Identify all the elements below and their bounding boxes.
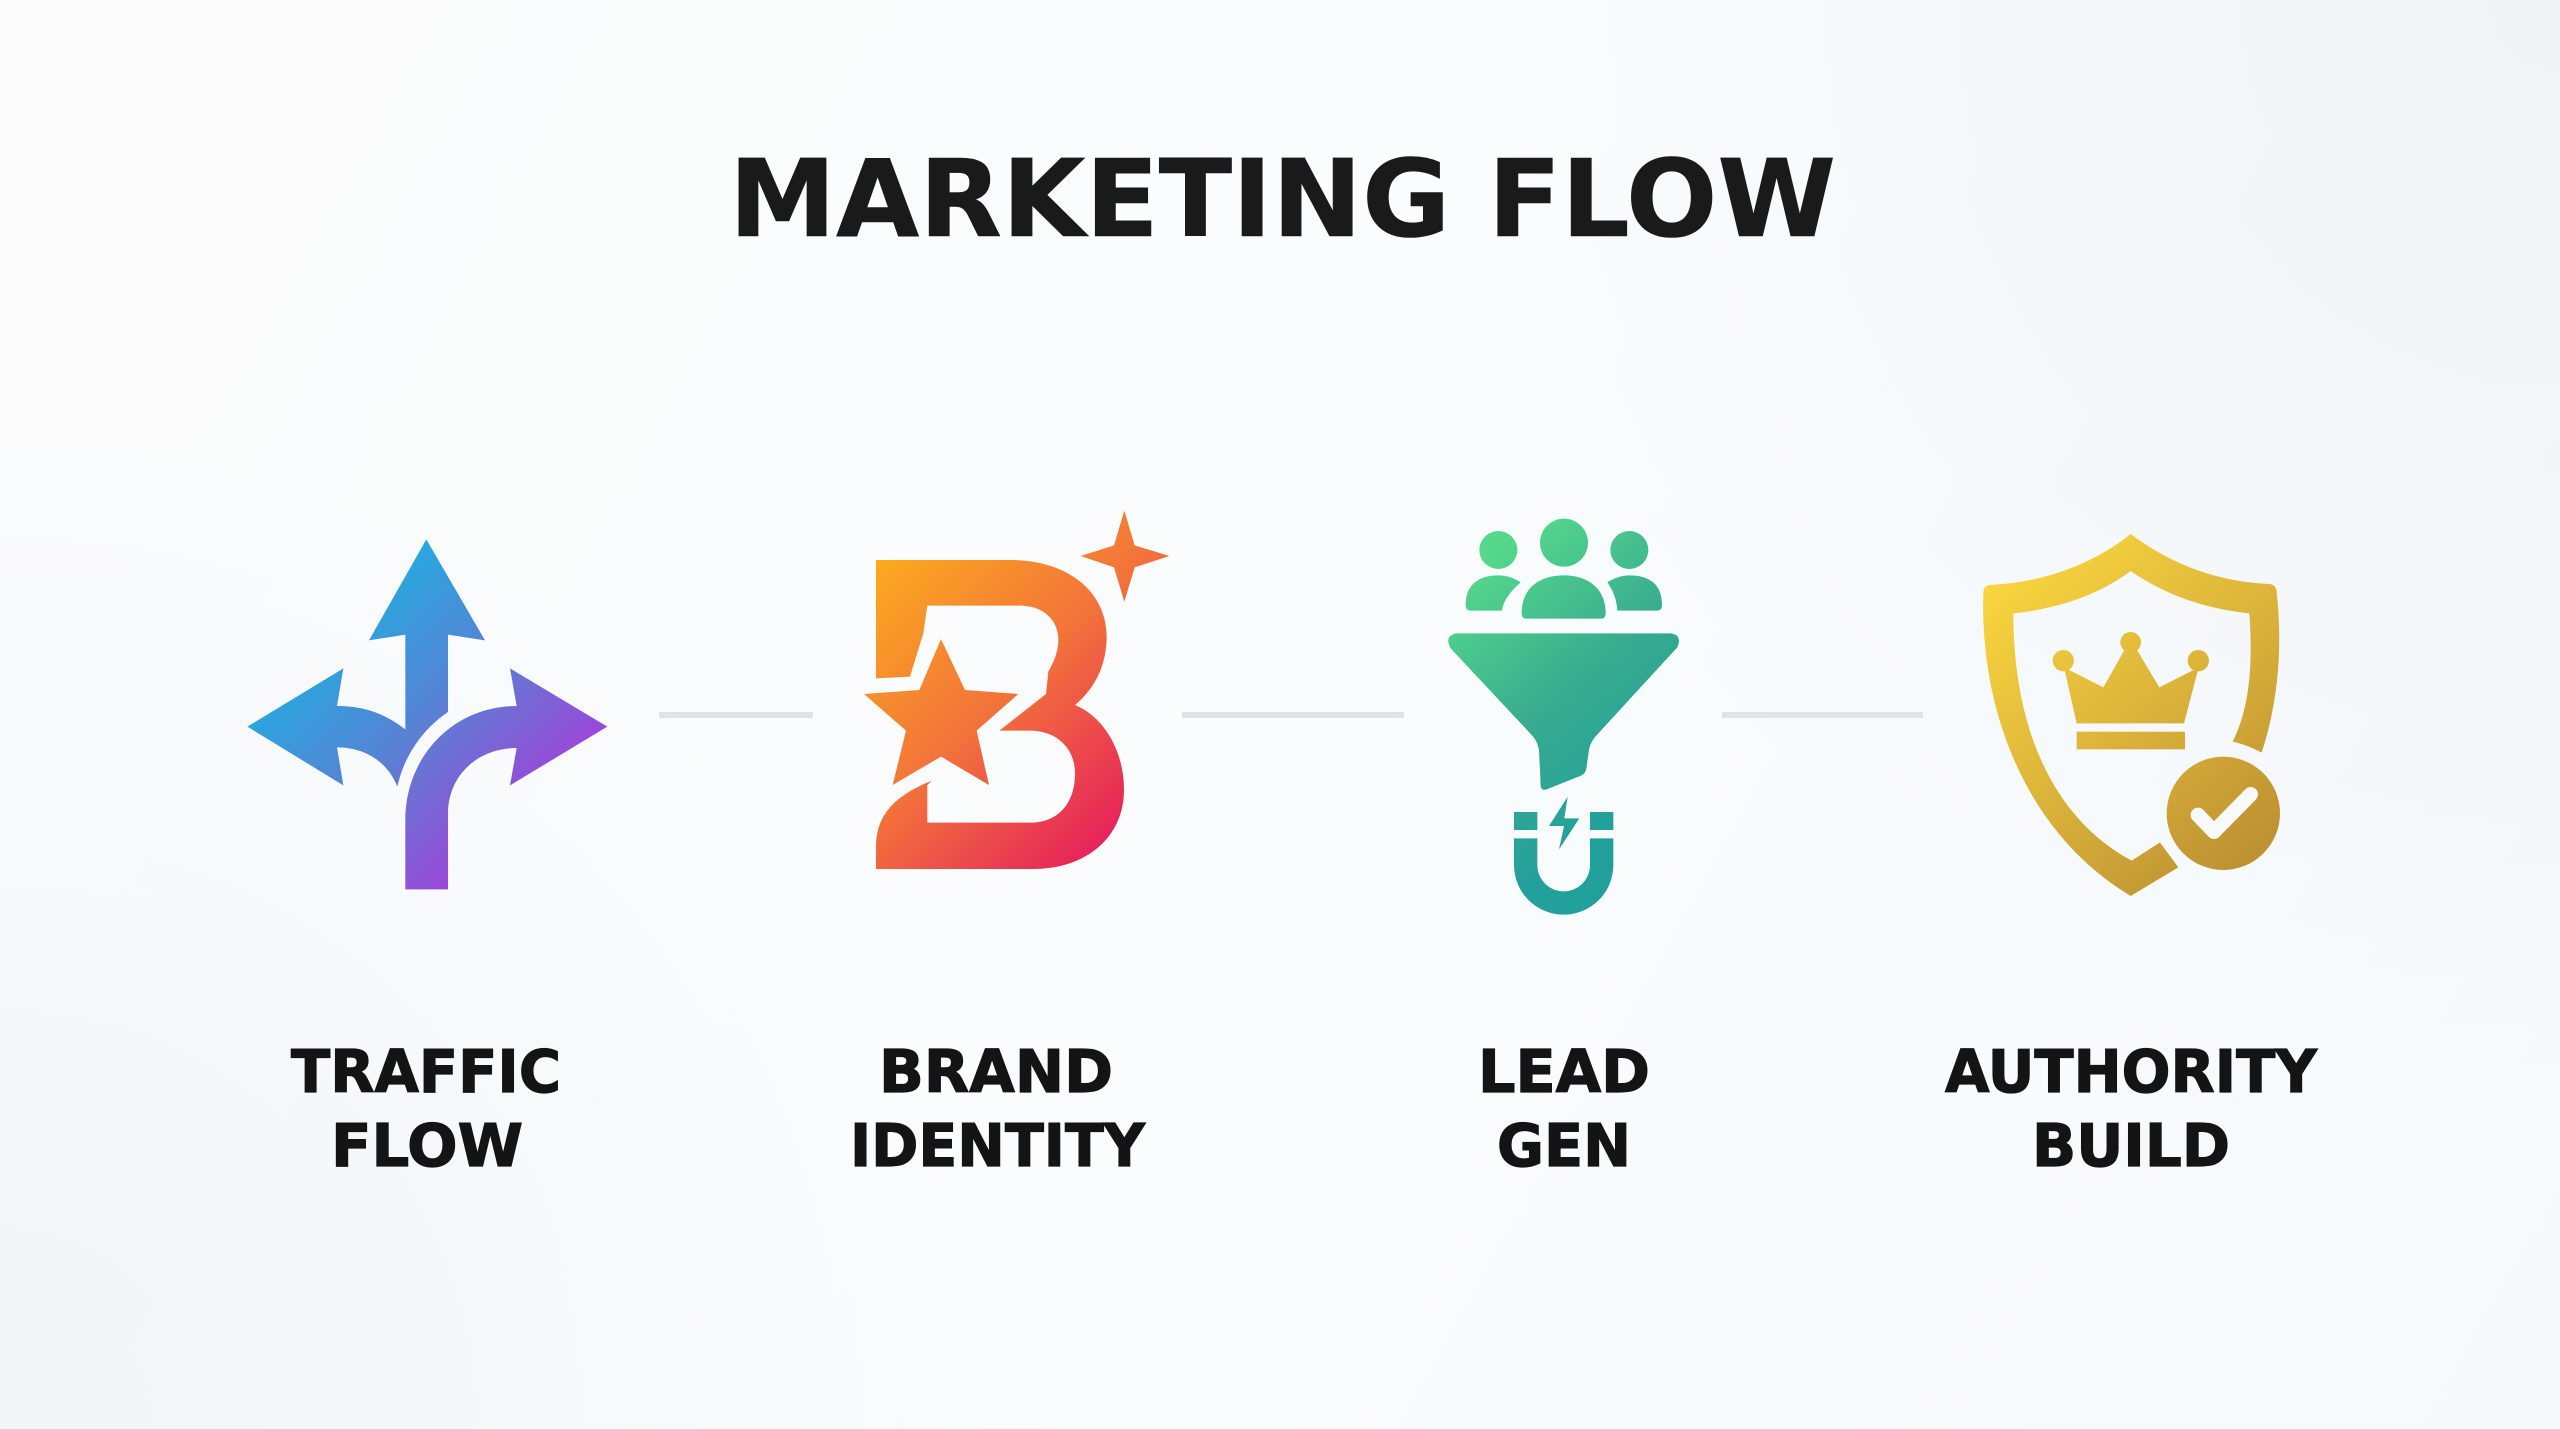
label: brand identity: IDENTITY xyxy=(850,1111,1146,1180)
check badge xyxy=(2167,757,2280,870)
icon: shield with crown and check xyxy=(1983,534,2280,896)
shield outline xyxy=(1983,534,2279,896)
label: traffic flow xyxy=(291,1037,561,1180)
connector: brand to lead xyxy=(1182,712,1404,718)
connector: lead to authority xyxy=(1722,712,1923,718)
icon: three-way arrows xyxy=(247,539,607,889)
label: authority build: BUILD xyxy=(2032,1111,2230,1180)
label: traffic flow: FLOW xyxy=(331,1111,523,1180)
connector: traffic to brand xyxy=(659,712,813,718)
label: brand identity xyxy=(850,1037,1146,1180)
label: traffic flow: TRAFFIC xyxy=(291,1037,561,1106)
letter B xyxy=(876,560,1124,869)
funnel xyxy=(1448,633,1679,790)
up and left arrows xyxy=(247,539,485,787)
right arrow with stem xyxy=(405,668,607,889)
label: authority build xyxy=(1945,1037,2318,1180)
crown xyxy=(2053,632,2209,749)
label: authority build: AUTHORITY xyxy=(1945,1037,2318,1106)
label: lead gen: LEAD xyxy=(1478,1037,1650,1106)
label: lead gen xyxy=(1478,1037,1650,1180)
label: brand identity: BRAND xyxy=(879,1037,1113,1106)
star xyxy=(864,639,1018,785)
icon: letter B with stars xyxy=(864,511,1169,869)
label: lead gen: GEN xyxy=(1497,1111,1631,1180)
magnet xyxy=(1514,797,1613,915)
people xyxy=(1466,519,1662,619)
sparkle xyxy=(1081,511,1169,602)
icon: funnel with people and magnet xyxy=(1448,519,1679,915)
title: MARKETING FLOW xyxy=(729,138,1836,262)
